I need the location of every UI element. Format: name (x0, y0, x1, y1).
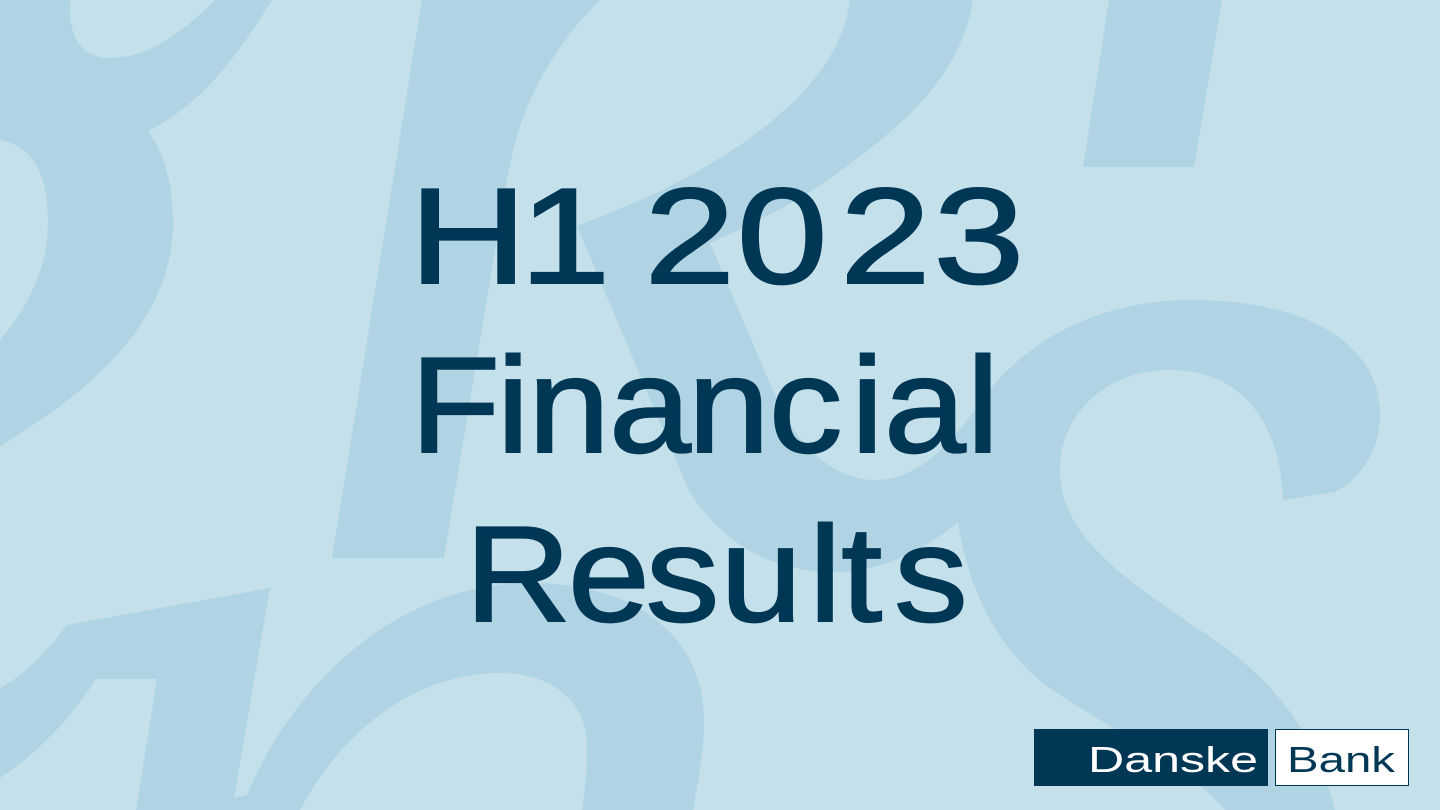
logo: Danske Bank (1034, 729, 1408, 786)
title (409, 160, 1024, 650)
title: Results (465, 498, 968, 650)
logo: Danske Bank: Danske (1088, 739, 1258, 780)
title: H1 2023 (409, 160, 1024, 312)
logo: Danske Bank: Bank (1287, 739, 1396, 780)
title: Financial (410, 329, 999, 481)
